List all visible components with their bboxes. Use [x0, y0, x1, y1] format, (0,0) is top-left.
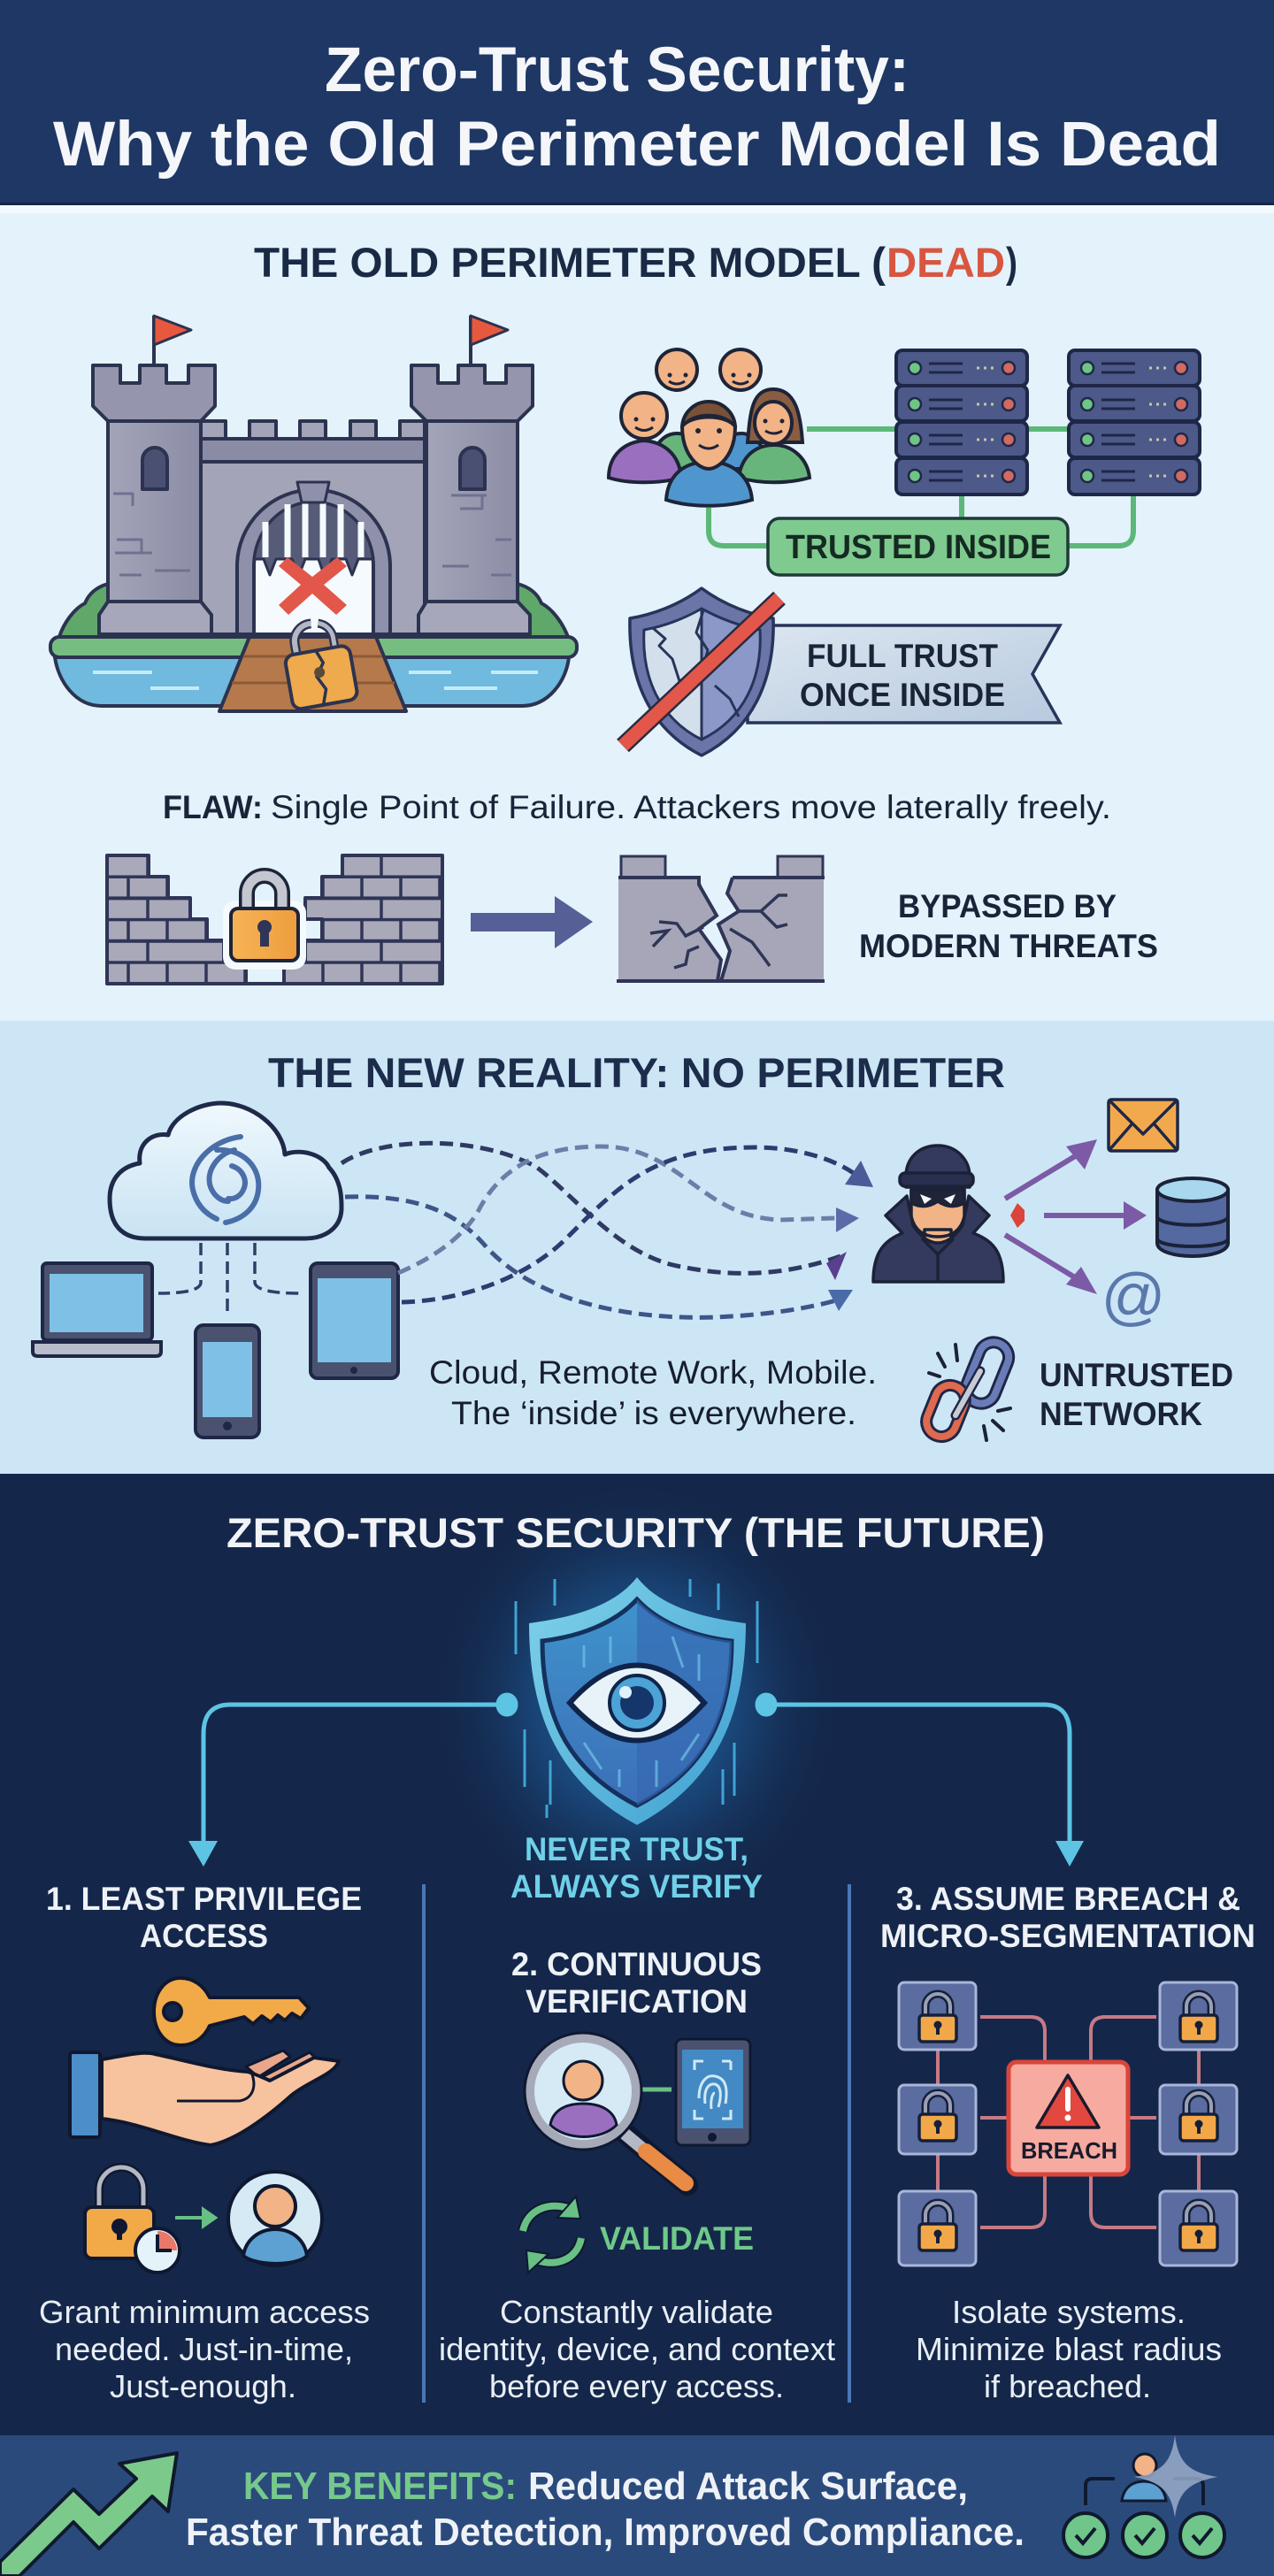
dashed connection curves — [342, 1143, 858, 1317]
green link line — [641, 2088, 672, 2091]
panel: new reality — [0, 1021, 1274, 1474]
column 2: continuous verification — [439, 1946, 835, 2404]
panel: old perimeter model — [0, 205, 1274, 1021]
icon: moat and drawbridge — [50, 637, 577, 711]
green network links — [709, 429, 1133, 546]
eye — [570, 1665, 704, 1741]
device link lines — [158, 1243, 301, 1315]
locked segment tiles — [899, 1982, 1237, 2266]
benefits text: KEY BENEFITS: — [243, 2465, 517, 2508]
description: continuous verification: identity, device, and context — [439, 2331, 835, 2367]
full trust banner: ONCE INSIDE — [800, 677, 1005, 713]
icon: open hand — [70, 2051, 339, 2145]
header banner — [0, 0, 1274, 205]
heading: old perimeter: THE OLD PERIMETER MODEL ( — [254, 239, 886, 286]
red x on gate — [279, 557, 347, 615]
trusted inside badge — [768, 518, 1068, 575]
heading: new reality: THE NEW REALITY: NO PERIMETER — [268, 1049, 1005, 1096]
icon: phone — [196, 1325, 259, 1438]
description: assume breach: Minimize blast radius — [916, 2331, 1222, 2367]
description: continuous verification: before every access. — [489, 2368, 784, 2404]
heading: least privilege: ACCESS — [140, 1918, 268, 1954]
untrusted network label: UNTRUSTED — [1040, 1357, 1233, 1393]
description: least privilege: Just-enough. — [110, 2368, 296, 2404]
bypassed label — [859, 888, 1158, 964]
icon: user circle — [228, 2172, 322, 2266]
bypassed label: MODERN THREATS — [859, 928, 1158, 964]
icon: envelope — [1109, 1100, 1178, 1151]
heading: assume breach: MICRO-SEGMENTATION — [880, 1918, 1255, 1954]
icon: timed lock — [85, 2167, 180, 2273]
caption: inside is everywhere: The ‘inside’ is everywhere. — [451, 1395, 856, 1431]
icon: tablet — [311, 1263, 398, 1378]
tagline: never trust: NEVER TRUST, — [525, 1831, 748, 1867]
lock icons — [919, 1994, 1217, 2250]
caption: inside is everywhere: Cloud, Remote Work, Mobile. — [429, 1354, 877, 1391]
column dividers — [424, 1884, 849, 2403]
sparkle — [1134, 2435, 1217, 2518]
small green arrow — [175, 2210, 215, 2226]
icon: broken padlock — [280, 617, 358, 710]
description: continuous verification — [439, 2294, 835, 2404]
benefits text: Faster Threat Detection, Improved Compliance. — [186, 2511, 1025, 2554]
icon: magnifier — [525, 2033, 687, 2185]
description: assume breach: if breached. — [984, 2368, 1151, 2404]
icon: database — [1157, 1178, 1228, 1256]
icon: at sign: @ — [1101, 1261, 1166, 1332]
heading: assume breach — [880, 1881, 1255, 1954]
heading: continuous verification: 2. CONTINUOUS — [511, 1946, 762, 1982]
icon: fingerprint tablet — [676, 2039, 750, 2145]
flags — [154, 316, 508, 365]
description: least privilege: needed. Just-in-time, — [55, 2331, 353, 2367]
arrow: wall to cracked wall — [471, 896, 593, 948]
title — [53, 35, 1221, 180]
panel: zero-trust security — [41, 1516, 1253, 2404]
icon: cracked wall — [617, 856, 825, 981]
data streaks — [516, 1579, 757, 1818]
tagline: never trust — [510, 1831, 763, 1905]
label: validate: VALIDATE — [600, 2220, 754, 2257]
trusted inside badge: TRUSTED INSIDE — [786, 529, 1051, 566]
caption: inside is everywhere — [429, 1354, 877, 1431]
title: Zero-Trust Security: — [325, 35, 909, 105]
bypassed label: BYPASSED BY — [898, 888, 1117, 924]
heading: least privilege — [46, 1881, 362, 1954]
title: Why the Old Perimeter Model Is Dead — [53, 110, 1221, 180]
untrusted network label — [1040, 1357, 1233, 1432]
icon: refresh arrows — [523, 2196, 581, 2273]
red alert diamond — [1010, 1203, 1025, 1228]
heading: old perimeter: DEAD — [886, 239, 1005, 286]
full trust banner — [748, 625, 1060, 723]
icon: cracked shield — [623, 588, 779, 755]
icon: verified team — [1063, 2435, 1224, 2557]
untrusted network label: NETWORK — [1040, 1396, 1202, 1432]
red slash — [623, 598, 779, 746]
icon: broken chain — [922, 1338, 1013, 1441]
description: assume breach: Isolate systems. — [952, 2294, 1186, 2330]
connector arrows from shield — [188, 1695, 1084, 1867]
panel: key benefits footer — [0, 2435, 1274, 2576]
description: assume breach — [916, 2294, 1222, 2404]
icon: server rack 2 — [1069, 350, 1200, 494]
people group — [609, 349, 810, 506]
benefits text — [186, 2465, 1025, 2554]
flaw statement: Single Point of Failure. Attackers move laterally freely. — [271, 789, 1111, 825]
heading: assume breach: 3. ASSUME BREACH & — [896, 1881, 1240, 1917]
heading: continuous verification: VERIFICATION — [526, 1983, 748, 2020]
full trust banner: FULL TRUST — [807, 638, 998, 674]
benefits text: Reduced Attack Surface, — [528, 2465, 968, 2508]
tagline: never trust: ALWAYS VERIFY — [510, 1868, 763, 1905]
flaw statement: FLAW: — [163, 789, 263, 825]
icon: eye shield — [529, 1577, 746, 1825]
column 3: assume breach — [880, 1881, 1255, 2404]
heading: old perimeter: ) — [1006, 239, 1017, 286]
icon: laptop — [33, 1263, 161, 1356]
icon: breached brick wall with lock — [107, 855, 442, 984]
description: least privilege — [39, 2294, 370, 2404]
heading: least privilege: 1. LEAST PRIVILEGE — [46, 1881, 362, 1917]
icon: green growth arrow — [0, 2453, 177, 2576]
icon: cloud — [110, 1103, 342, 1238]
icon: server rack 1 — [896, 350, 1027, 494]
purple outgoing arrows — [1005, 1139, 1147, 1294]
icon: hooded attacker — [873, 1146, 1003, 1282]
description: least privilege: Grant minimum access — [39, 2294, 370, 2330]
description: continuous verification: Constantly validate — [500, 2294, 773, 2330]
arrowheads — [826, 1161, 873, 1311]
heading: zero-trust: ZERO-TRUST SECURITY (THE FUTURE) — [226, 1509, 1045, 1556]
breach alert box — [1009, 2062, 1128, 2174]
column 1: least privilege — [39, 1881, 370, 2404]
icon: key — [154, 1978, 309, 2045]
icon: castle — [59, 316, 568, 637]
breach alert box: BREACH — [1021, 2137, 1117, 2164]
heading: continuous verification — [511, 1946, 762, 2020]
segment links — [938, 2017, 1199, 2227]
